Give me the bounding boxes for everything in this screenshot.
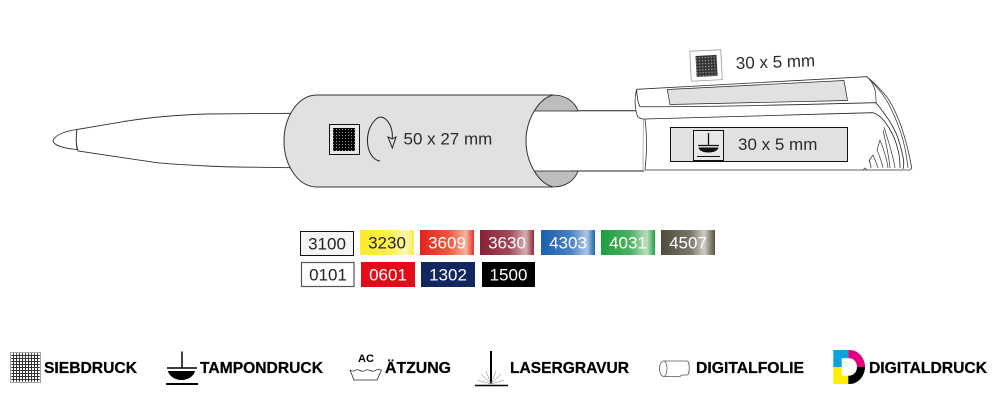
icon: rotation arrow xyxy=(367,117,396,161)
legend: print techniques xyxy=(10,350,987,386)
swatch 0601: 0601 xyxy=(369,266,407,284)
legend item: Digitalfolie: DIGITALFOLIE xyxy=(696,360,804,377)
swatch 4303: 4303 xyxy=(549,234,587,252)
colour swatches xyxy=(300,230,715,287)
swatch 0601 xyxy=(361,262,415,287)
swatch 4507 xyxy=(661,230,715,255)
legend item: Lasergravur xyxy=(475,351,629,386)
legend item: Ätzung: ÄTZUNG xyxy=(385,359,451,377)
legend item: Lasergravur: LASERGRAVUR xyxy=(510,360,629,377)
print sleeve xyxy=(284,95,578,187)
legend item: Siebdruck xyxy=(10,352,137,383)
legend item: Tampondruck xyxy=(166,352,323,384)
swatch 0101: 0101 xyxy=(309,266,347,284)
swatch 4031: 4031 xyxy=(609,234,647,252)
swatch 1500 xyxy=(482,262,535,287)
clip outline xyxy=(635,77,912,170)
pen tip xyxy=(53,130,77,150)
sleeve size label: 50 x 27 mm xyxy=(404,130,492,148)
swatch 4031 xyxy=(601,230,655,255)
swatch 4303 xyxy=(541,230,595,255)
swatch 4507: 4507 xyxy=(669,234,707,252)
pen illustration xyxy=(53,50,912,187)
pen upper barrel xyxy=(530,111,646,171)
pen lower barrel xyxy=(76,113,290,168)
swatch 3630: 3630 xyxy=(488,234,526,252)
swatch 3100: 3100 xyxy=(308,234,346,254)
swatch 1302 xyxy=(421,262,475,287)
swatch 3609: 3609 xyxy=(428,234,466,252)
legend item: Tampondruck: TAMPONDRUCK xyxy=(200,360,323,377)
swatch 1302: 1302 xyxy=(429,266,467,284)
legend item: Digitaldruck xyxy=(833,350,987,384)
clip inner lines xyxy=(645,113,900,168)
swatch 1500: 1500 xyxy=(490,266,527,284)
legend item: Ätzung xyxy=(350,353,451,380)
swatch 3609 xyxy=(420,230,474,255)
legend item: Siebdruck: SIEBDRUCK xyxy=(44,360,137,377)
clip end xyxy=(635,77,912,170)
side print area xyxy=(670,128,848,162)
icon: screen print box xyxy=(330,124,360,154)
legend item: Ätzung: AC xyxy=(358,353,374,365)
top size label: 30 x 5 mm xyxy=(735,51,815,73)
swatch 3100 xyxy=(300,232,354,256)
clip ribs xyxy=(863,127,895,170)
swatch 0101 xyxy=(302,262,354,286)
swatch 3230 xyxy=(360,230,414,255)
side size label: 30 x 5 mm xyxy=(738,135,817,154)
icon: tilted screen print box xyxy=(690,50,722,81)
icon: pad print box xyxy=(694,130,724,160)
swatch 3630 xyxy=(480,230,534,255)
top print area xyxy=(667,80,848,104)
legend item: Digitaldruck: DIGITALDRUCK xyxy=(869,360,987,377)
swatch 3230: 3230 xyxy=(368,234,406,252)
